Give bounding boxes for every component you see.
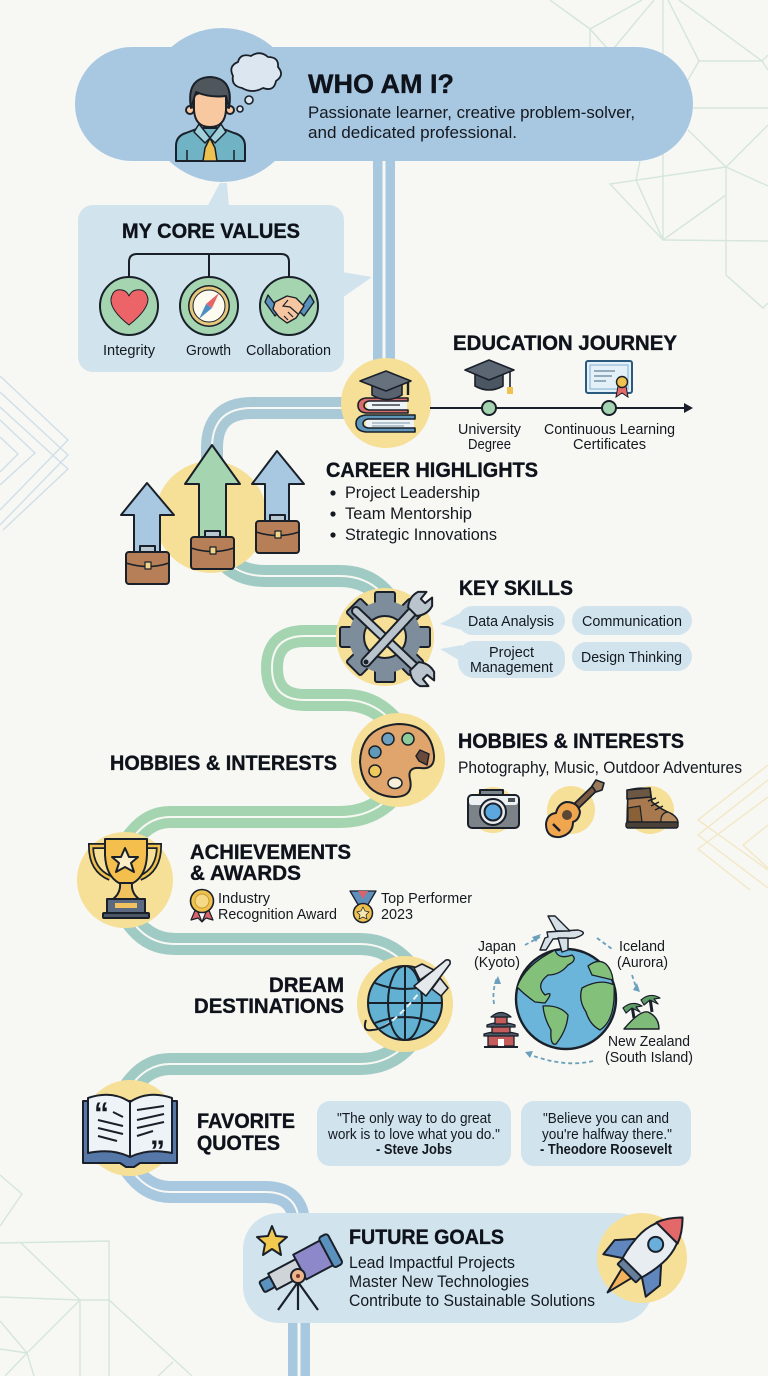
text: summary: Passionate learner, creative problem-solver, (308, 103, 635, 122)
pill: project management: Management (470, 659, 554, 676)
panel: who am I header (75, 28, 693, 182)
heading: who am I: WHO AM I? (308, 69, 454, 99)
section: achievements and awards (77, 832, 472, 928)
journey road (128, 160, 410, 1376)
pill: project management: Project (489, 644, 535, 661)
text: hobbies list: Photography, Music, Outdoor Adventures (458, 758, 742, 777)
icon: person thinking (176, 53, 281, 161)
panel: Theodore Roosevelt quote: you're halfway there." (542, 1126, 672, 1143)
heading: career highlights: CAREER HIGHLIGHTS (326, 459, 538, 482)
text: iceland aurora: Iceland (619, 938, 665, 955)
pill: communication: Communication (582, 613, 682, 630)
icon: integrity heart (100, 277, 158, 335)
icon: rocket (585, 1195, 705, 1315)
text: top performer 2023: 2023 (381, 906, 413, 923)
pill: data analysis (440, 606, 565, 635)
text: growth: Growth (186, 342, 231, 359)
icon: award rosette (190, 890, 214, 922)
heading: hobbies left: HOBBIES & INTERESTS (110, 752, 337, 775)
icon: certificate (586, 361, 632, 397)
text: japan kyoto: (Kyoto) (474, 954, 520, 971)
list: career items: Project Leadership (345, 483, 480, 502)
icon: collaboration handshake (260, 277, 318, 335)
text: collaboration: Collaboration (246, 342, 331, 359)
text: japan kyoto: Japan (478, 938, 516, 955)
text: new zealand south island: (South Island) (605, 1049, 693, 1066)
icon: graduation cap (465, 360, 514, 394)
text: summary: and dedicated professional. (308, 123, 517, 142)
text: goals list: Lead Impactful Projects (349, 1253, 515, 1272)
text: goals list: Contribute to Sustainable Solutions (349, 1291, 595, 1310)
heading: dream destinations: DREAM (269, 974, 344, 997)
icon: earth globe (516, 949, 616, 1049)
timeline arrow (430, 401, 693, 415)
icon: open book: “ (94, 1097, 109, 1130)
list: career items: Team Mentorship (345, 504, 472, 523)
panel: Steve Jobs quote: work is to love what you do." (327, 1126, 500, 1143)
icon: gear and tools (336, 587, 439, 691)
section: hobbies and interests (110, 713, 742, 837)
icon: pagoda (484, 1012, 518, 1048)
icon: growth compass (180, 277, 238, 335)
icon: camera (468, 787, 519, 833)
text: new zealand south island: New Zealand (608, 1033, 690, 1050)
icon: island (623, 995, 660, 1029)
text: university degree: Degree (468, 436, 511, 453)
heading: future goals: FUTURE GOALS (349, 1226, 504, 1249)
icon: guitar (546, 780, 604, 837)
icon: globe with plane (357, 956, 453, 1052)
section: favorite quotes (82, 1080, 691, 1176)
pill: data analysis: Data Analysis (468, 613, 554, 630)
panel: future goals (243, 1195, 705, 1323)
heading: key skills: KEY SKILLS (459, 577, 573, 600)
text: industry recognition award: Industry (218, 890, 270, 907)
arrowheads: travel loop (494, 934, 640, 1058)
list: career items (330, 483, 497, 544)
panel: core values (78, 183, 372, 372)
list: career items: Strategic Innovations (345, 525, 497, 544)
icon: books and graduation cap (341, 358, 431, 448)
pill: design thinking: Design Thinking (581, 649, 682, 666)
text: goals list: Master New Technologies (349, 1272, 529, 1291)
text: continuous learning certificates: Continuous Learning (544, 421, 675, 438)
icon: paint palette (351, 713, 445, 807)
heading: favorite quotes: QUOTES (197, 1132, 280, 1155)
heading: hobbies right: HOBBIES & INTERESTS (458, 730, 684, 753)
icon: career arrows and briefcases (121, 445, 304, 584)
text: industry recognition award: Recognition Award (218, 906, 337, 923)
icon: airplane (540, 916, 583, 952)
heading: education journey: EDUCATION JOURNEY (453, 332, 677, 355)
section: education journey (341, 332, 693, 453)
heading: core values: MY CORE VALUES (122, 220, 300, 243)
section: career highlights (121, 445, 538, 584)
heading: achievements: & AWARDS (190, 862, 301, 885)
icon: trophy (77, 832, 173, 928)
section: dream destinations (194, 916, 693, 1066)
panel: Theodore Roosevelt quote: "Believe you can and (543, 1110, 669, 1127)
text: university degree: University (458, 421, 521, 438)
pill: design thinking (572, 642, 692, 671)
heading: favorite quotes: FAVORITE (197, 1110, 295, 1133)
pill: communication (572, 606, 692, 635)
icon: star (257, 1226, 287, 1255)
heading: achievements: ACHIEVEMENTS (190, 841, 351, 864)
icon: open book: ” (150, 1135, 165, 1168)
pill: project management (440, 641, 565, 678)
panel: Steve Jobs quote: "The only way to do great (337, 1110, 492, 1127)
text: integrity: Integrity (103, 342, 155, 359)
text: iceland aurora: (Aurora) (617, 954, 668, 971)
icon: telescope (254, 1233, 343, 1310)
panel: Theodore Roosevelt quote (521, 1101, 691, 1166)
icon: open book (82, 1080, 178, 1176)
dashed arrows: travel loop (493, 937, 637, 1063)
panel: Steve Jobs quote: - Steve Jobs (376, 1141, 452, 1158)
panel: Steve Jobs quote (317, 1101, 511, 1166)
section: key skills (336, 577, 692, 691)
heading: dream destinations: DESTINATIONS (194, 995, 344, 1018)
icon: medal (350, 891, 376, 922)
text: continuous learning certificates: Certificates (573, 436, 646, 453)
icon: hiking boot (626, 786, 678, 834)
text: top performer 2023: Top Performer (381, 890, 472, 907)
panel: Theodore Roosevelt quote: - Theodore Roosevelt (540, 1141, 672, 1158)
